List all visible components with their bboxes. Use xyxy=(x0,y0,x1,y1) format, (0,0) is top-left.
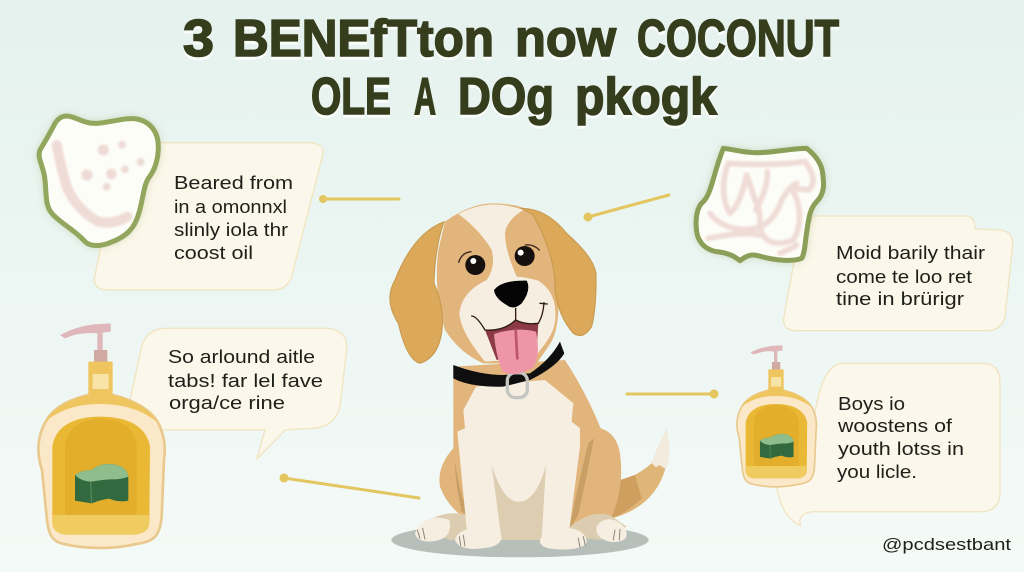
title: pkogk xyxy=(575,68,717,126)
credit handle: @pcdsestbant xyxy=(882,535,1011,554)
text: top left: Beared from xyxy=(174,172,293,193)
mouth and tongue xyxy=(472,303,547,374)
text: top left xyxy=(174,172,293,263)
chest xyxy=(457,380,580,540)
text: bottom right: Boys io xyxy=(838,393,905,414)
back paws xyxy=(415,518,627,542)
icon: oil bottle right xyxy=(737,345,816,487)
tail xyxy=(608,429,669,519)
text: top right xyxy=(836,242,985,309)
ground shadow xyxy=(391,523,649,557)
eyes xyxy=(459,245,539,275)
callout: bottom right xyxy=(776,363,1000,526)
text: bottom right: you licle. xyxy=(837,461,917,482)
collar xyxy=(453,342,564,398)
text: top right: come te loo ret xyxy=(836,266,972,287)
panel: bottom left benefit xyxy=(38,323,347,548)
title: COCONUT xyxy=(637,10,839,68)
panel: top left benefit xyxy=(39,116,323,290)
title: now xyxy=(515,10,617,68)
text: top right: Moid barily thair xyxy=(836,242,985,263)
text: bottom left: So arlound aitle xyxy=(168,346,315,367)
left ear xyxy=(390,222,444,363)
callout: top right xyxy=(784,216,1013,331)
callout: top left xyxy=(94,143,323,290)
title xyxy=(183,10,839,126)
front paws xyxy=(455,528,587,550)
head xyxy=(437,203,558,363)
icon: skin patch right xyxy=(696,148,824,261)
text: bottom right: youth lotss in xyxy=(838,438,964,459)
title: BENEfTton xyxy=(233,10,494,68)
title: 3 xyxy=(183,10,214,68)
icon: oil bottle left xyxy=(38,323,165,548)
text: bottom left: tabs! far lel fave xyxy=(168,370,323,391)
title: OLE xyxy=(311,68,391,126)
callout: bottom left xyxy=(130,328,347,459)
body xyxy=(420,360,627,540)
panel: top right benefit xyxy=(696,148,1013,331)
icon: skin patch left xyxy=(39,116,158,246)
title: DOg xyxy=(458,68,554,126)
right ear xyxy=(522,208,596,336)
illustration: dog xyxy=(390,203,669,557)
nose xyxy=(494,281,528,307)
text: bottom left xyxy=(168,346,323,413)
text: top left: coost oil xyxy=(174,242,253,263)
belly xyxy=(492,465,546,540)
text: top right: tine in brürigr xyxy=(836,288,964,309)
text: bottom right xyxy=(837,393,964,482)
text: top left: slinly iola thr xyxy=(174,219,288,240)
panel: bottom right benefit xyxy=(737,345,1000,526)
text: bottom left: orga/ce rine xyxy=(169,392,285,413)
title: A xyxy=(414,68,436,126)
connector lines xyxy=(280,195,718,498)
text: bottom right: woostens of xyxy=(837,415,953,436)
text: top left: in a omonnxl xyxy=(174,196,287,217)
